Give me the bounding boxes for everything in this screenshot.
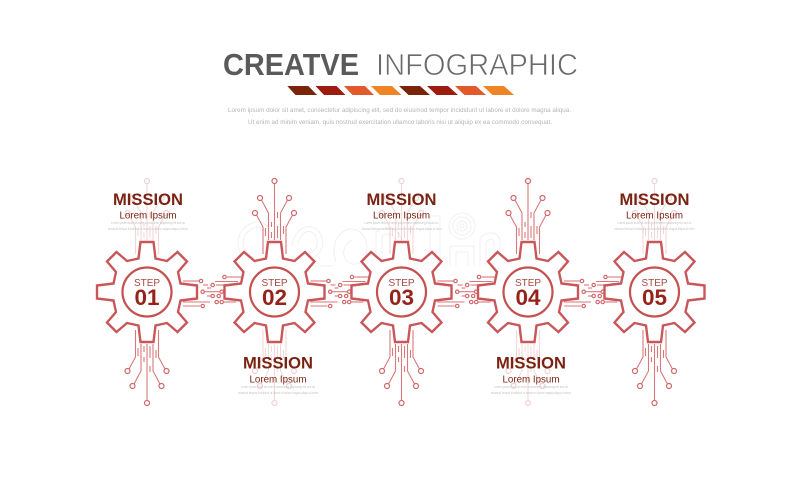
step 04 gear: 04	[515, 285, 541, 310]
subtitle text	[228, 107, 571, 126]
mission label 2	[238, 354, 318, 395]
connector: gear 2 to 3	[310, 275, 370, 308]
mission label 2: Lorem ipsum dolor sit amet, consectetur adipiscing elit sed do	[241, 385, 315, 389]
circuit: gear 5 bottom	[632, 330, 676, 406]
circuit: gear 2 top	[252, 178, 296, 254]
title: INFOGRAPHIC	[376, 47, 578, 82]
mission label 3: Lorem ipsum dolor sit amet, consectetur adipiscing elit sed do	[364, 221, 439, 225]
circuit: gear 3 bottom	[380, 330, 424, 406]
step 02 gear	[224, 242, 324, 342]
mission label 4	[491, 354, 571, 395]
step 02 gear: STEP	[261, 278, 288, 289]
step 05 gear	[604, 242, 704, 342]
step 03 gear	[352, 242, 452, 342]
subtitle text: Ut enim ad minim veniam, quis nostrud exercitation ullamco laboris nisi ut aliquip ex ea commodo consequat.	[248, 119, 552, 126]
step 02 gear: 02	[262, 285, 287, 310]
mission label 5	[614, 190, 695, 231]
mission label 3: Lorem Ipsum	[373, 210, 430, 222]
title	[223, 47, 578, 82]
step 01 gear: STEP	[134, 278, 160, 289]
mission label 3	[362, 190, 442, 231]
circuit: gear 1 bottom	[125, 330, 169, 406]
subtitle text: Lorem ipsum dolor sit amet, consectetur adipiscing elit, sed do eiusmod tempor incididunt ut labore et dolore magna aliqua.	[228, 107, 571, 114]
connector: gear 1 to 2	[183, 275, 242, 308]
step 01 gear: 01	[134, 285, 160, 310]
mission label 2: eiusmod tempor incididunt ut labore et dolore magna aliqua ut enim	[238, 391, 318, 395]
mission label 5: Lorem Ipsum	[626, 210, 683, 222]
mission label 1: eiusmod tempor incididunt ut labore et dolore magna aliqua ut enim	[108, 227, 188, 231]
mission label 2: MISSION	[243, 354, 313, 372]
title accent bar	[287, 86, 514, 95]
connector: gear 3 to 4	[438, 275, 496, 308]
mission label 4: Lorem Ipsum	[502, 374, 560, 386]
mission label 5: eiusmod tempor incididunt ut labore et dolore magna aliqua ut enim	[614, 227, 695, 231]
circuit: gear 4 top	[506, 178, 550, 254]
step 05 gear: STEP	[641, 278, 668, 289]
mission label 5: MISSION	[620, 190, 690, 209]
mission label 4: Lorem ipsum dolor sit amet, consectetur adipiscing elit sed do	[494, 385, 568, 389]
mission label 4: MISSION	[496, 354, 566, 372]
mission label 1	[108, 190, 188, 231]
mission label 3: MISSION	[366, 190, 436, 209]
step 03 gear: 03	[389, 285, 414, 310]
mission label 1: MISSION	[113, 190, 183, 209]
step 04 gear	[478, 242, 578, 342]
mission label 2: Lorem Ipsum	[250, 374, 307, 386]
connector: gear 4 to 5	[564, 275, 623, 308]
mission label 3: eiusmod tempor incididunt ut labore et dolore magna aliqua ut enim	[362, 227, 442, 231]
background watermark swirls	[238, 213, 500, 266]
mission label 1: Lorem ipsum dolor sit amet, consectetur adipiscing elit sed do	[111, 221, 185, 225]
mission label 1: Lorem Ipsum	[120, 210, 177, 222]
step 03 gear: STEP	[388, 278, 415, 289]
title: CREATVE	[223, 47, 359, 82]
step 05 gear: 05	[642, 285, 667, 310]
step 01 gear	[97, 242, 197, 342]
step 04 gear: STEP	[515, 278, 541, 289]
mission label 4: eiusmod tempor incididunt ut labore et dolore magna aliqua ut enim	[491, 391, 571, 395]
mission label 5: Lorem ipsum dolor sit amet, consectetur adipiscing elit sed do	[618, 221, 692, 225]
faint circuit traces behind mission labels	[125, 178, 676, 406]
